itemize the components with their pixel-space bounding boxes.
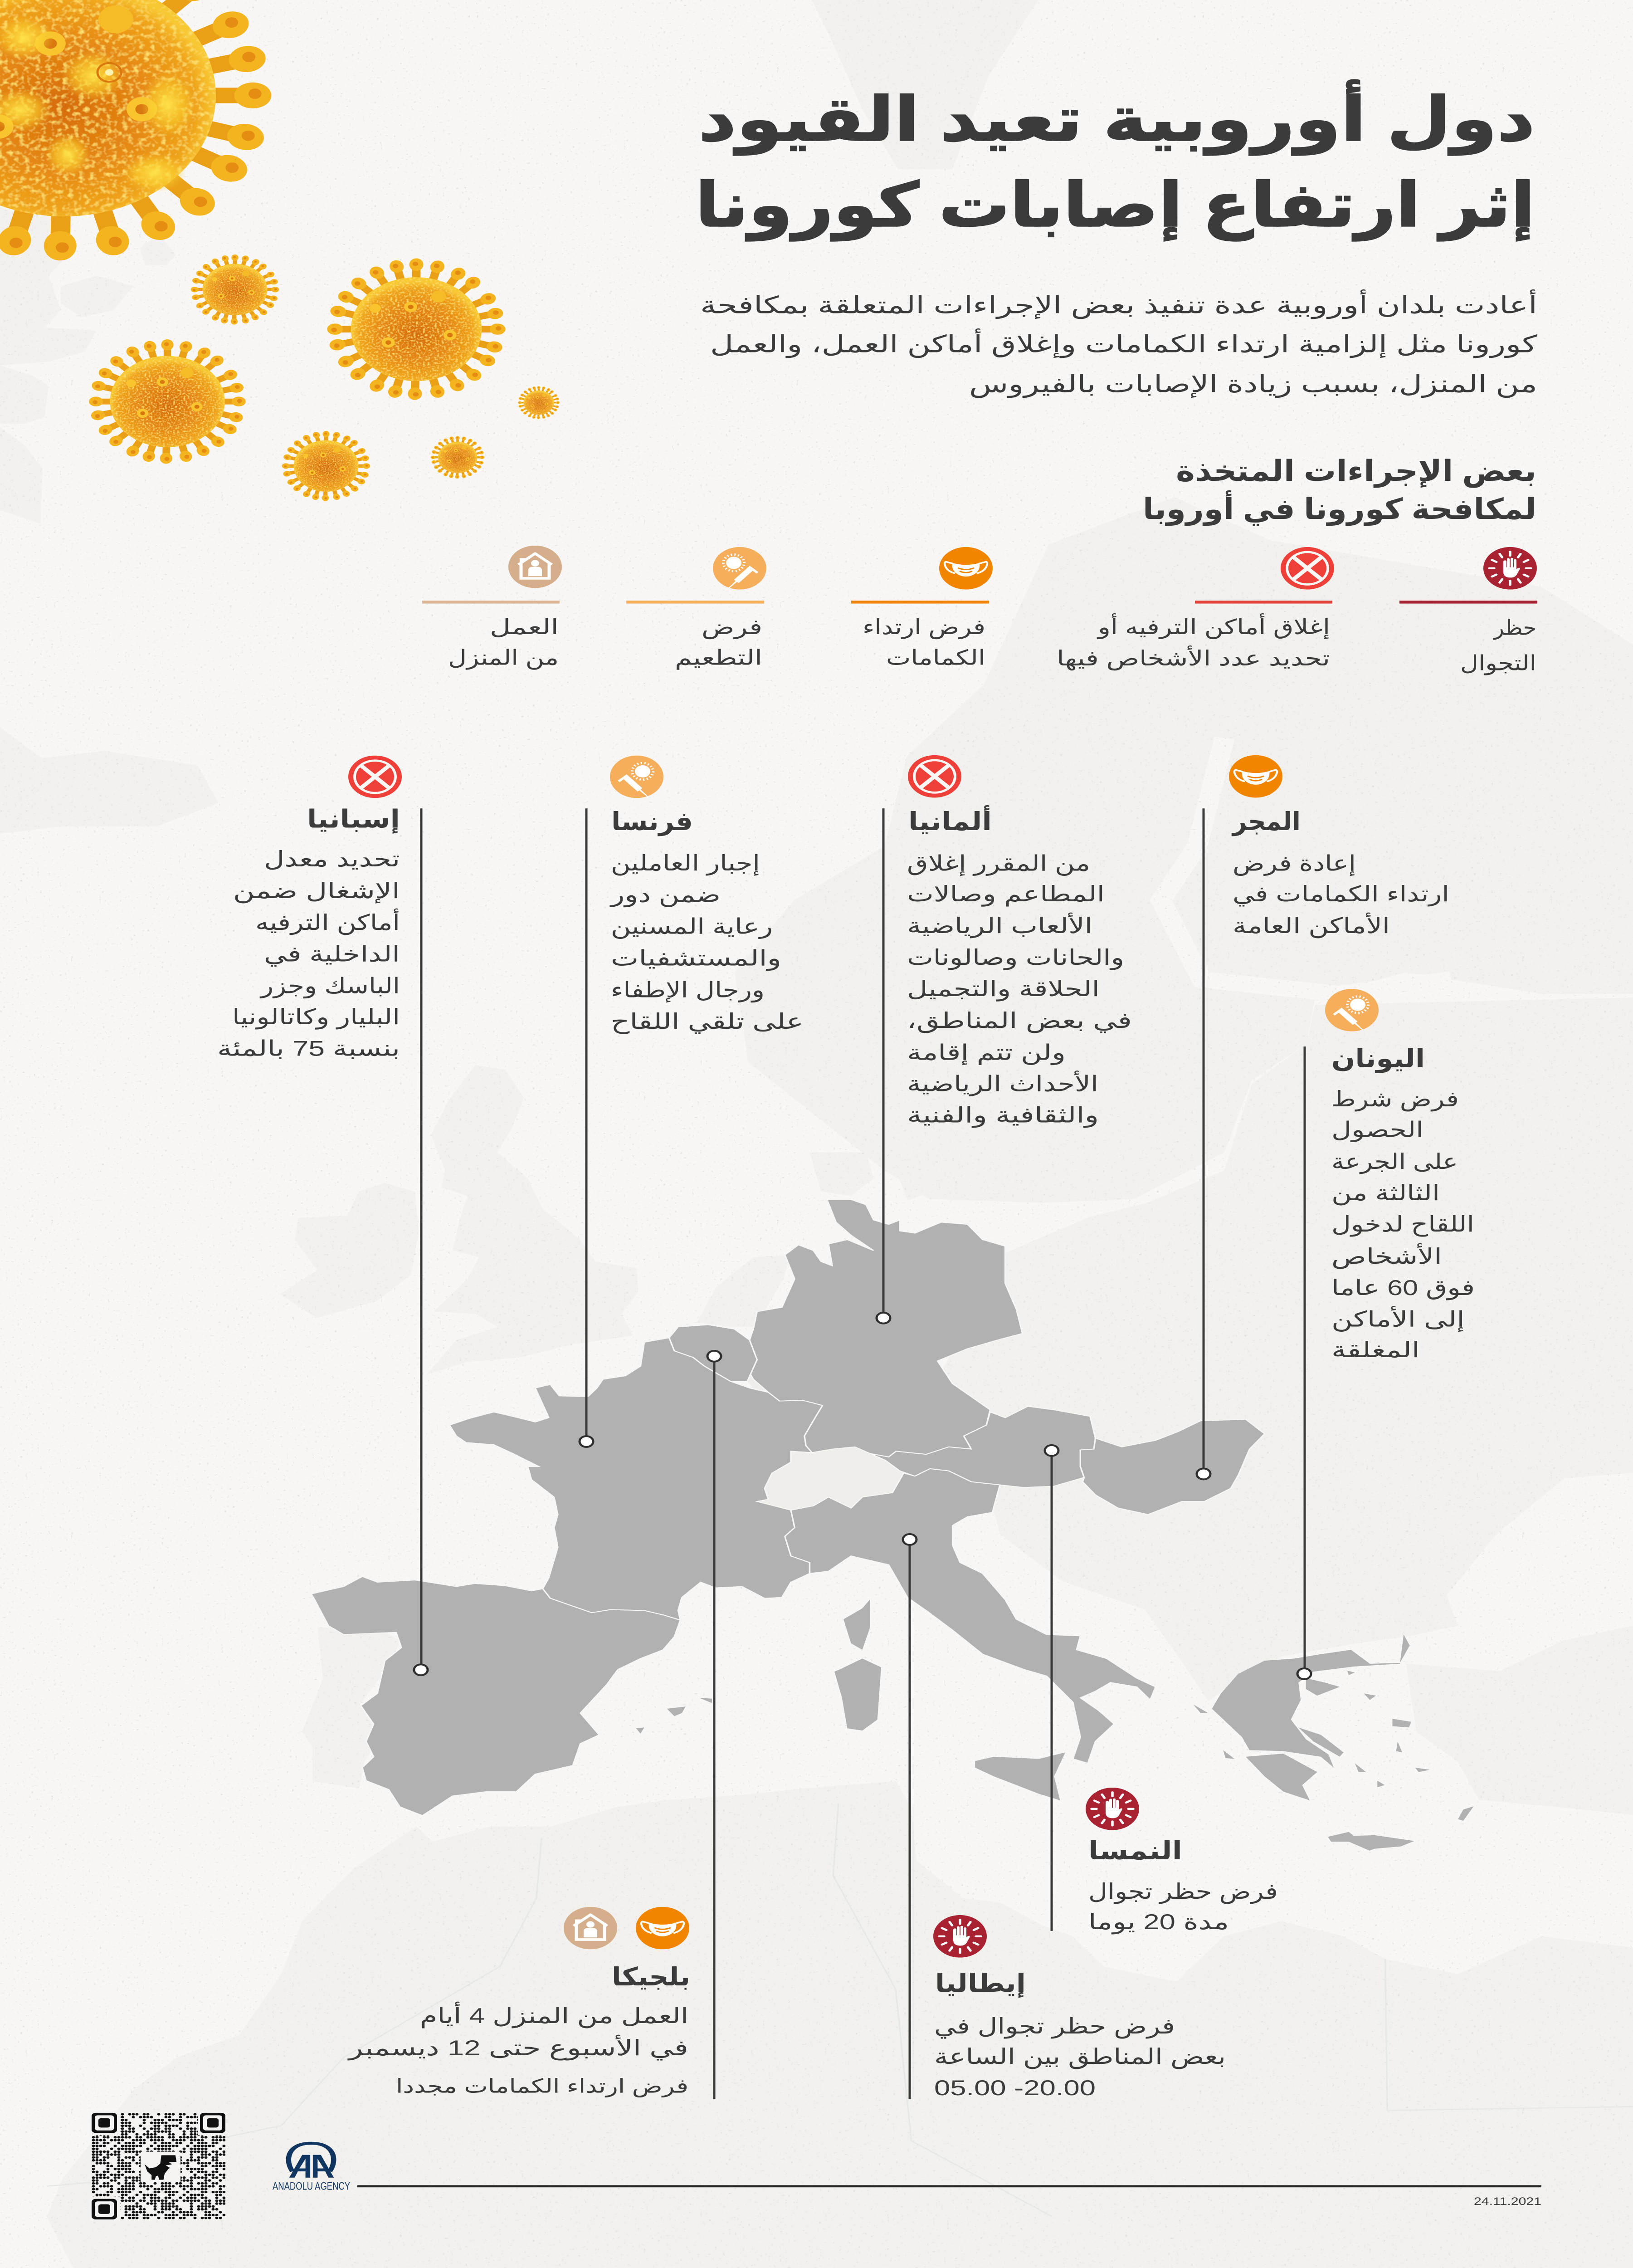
leader line xyxy=(903,1534,916,2099)
leader line xyxy=(1197,808,1210,1479)
legend: work from home: من المنزل xyxy=(448,646,559,670)
body text xyxy=(934,2014,1226,2100)
virus: cluster lower xyxy=(282,431,370,501)
map: Sardinia and Corsica xyxy=(834,1600,881,1730)
body text: إعادة فرض xyxy=(1233,851,1356,876)
body text: ضمن دور xyxy=(609,883,721,907)
leader line xyxy=(877,808,890,1324)
leader line xyxy=(414,808,428,1675)
body text: الداخلية في xyxy=(264,943,400,967)
virus: cluster small xyxy=(191,254,279,325)
legend: curfew: حظر xyxy=(1492,616,1536,640)
legend: vaccination xyxy=(626,547,766,670)
body text: في الأسبوع حتى 12 ديسمبر xyxy=(347,2034,688,2060)
legend: closures: تحديد عدد الأشخاص فيها xyxy=(1057,645,1330,671)
footer rule xyxy=(357,2185,1541,2187)
legend: vaccination: التطعيم xyxy=(675,646,762,670)
heading: النمسا xyxy=(1088,1837,1182,1865)
title: دول أوروبية تعيد القيود xyxy=(698,79,1535,156)
icon: closures xyxy=(348,756,402,798)
body text: ارتداء الكمامات في xyxy=(1233,882,1449,907)
icon: home xyxy=(564,1907,617,1949)
body text: على تلقي اللقاح xyxy=(611,1010,804,1034)
map: France xyxy=(449,1338,823,1620)
map: Belgium xyxy=(669,1325,757,1382)
body text: الأماكن العامة xyxy=(1233,912,1390,938)
map: Luxembourg xyxy=(747,1366,768,1392)
body text: اللقاح لدخول xyxy=(1331,1212,1474,1237)
heading: إسبانيا xyxy=(307,805,400,834)
map of affected European countries xyxy=(311,1199,1430,1816)
legend heading: بعض الإجراءات المتخذة xyxy=(1176,455,1536,488)
map: Sicily xyxy=(975,1752,1065,1800)
body text: بعض المناطق بين الساعة xyxy=(934,2045,1226,2069)
heading: المجر xyxy=(1231,808,1301,836)
map: Balearic islands xyxy=(636,1698,712,1734)
body text xyxy=(1088,1880,1278,1934)
body text: الأشخاص xyxy=(1331,1243,1442,1269)
body text: فرض ارتداء الكمامات مجددا xyxy=(396,2076,688,2097)
body text: المطاعم وصالات xyxy=(907,882,1105,907)
icon: crossed circle xyxy=(1281,547,1334,590)
title: إثر ارتفاع إصابات كورونا xyxy=(695,171,1535,241)
panel: Austria xyxy=(1045,1445,1278,1934)
icon: syringe and virus xyxy=(713,547,766,593)
map: Crete and Aegean islands xyxy=(1328,1806,1474,1851)
body text: على الجرعة xyxy=(1331,1150,1458,1174)
Anadolu Agency logo: ANADOLU AGENCY xyxy=(273,2180,350,2192)
legend: work from home: العمل xyxy=(490,616,559,639)
body text: والثقافية والفنية xyxy=(907,1103,1099,1128)
body text: بنسبة 75 بالمئة xyxy=(217,1037,400,1061)
icon: home xyxy=(508,546,562,588)
legend: curfew: التجوال xyxy=(1460,652,1536,675)
virus: large cropped top left xyxy=(0,0,271,261)
map: Italy xyxy=(785,1469,1155,1763)
panel: Belgium xyxy=(347,1351,721,2099)
heading: اليونان xyxy=(1331,1045,1425,1073)
leader line xyxy=(1045,1445,1058,1931)
Anadolu Agency logo xyxy=(273,2143,350,2192)
icon: curfew xyxy=(933,1915,987,1958)
legend: work from home xyxy=(422,546,562,670)
body text: ولن تتم إقامة xyxy=(907,1041,1066,1065)
legend: curfew xyxy=(1399,547,1537,675)
icon: face mask xyxy=(636,1907,689,1949)
body text: العمل من المنزل 4 أيام xyxy=(420,2002,688,2028)
heading: بلجيكا xyxy=(612,1963,690,1991)
body text: الثالثة من xyxy=(1331,1181,1440,1206)
map: Spain xyxy=(311,1577,680,1816)
virus: cluster left xyxy=(89,339,246,464)
map: Greece xyxy=(1193,1634,1430,1800)
icon: vaccination xyxy=(1325,989,1379,1035)
intro paragraph: كورونا مثل إلزامية ارتداء الكمامات وإغلاق أماكن العمل، والعمل xyxy=(710,328,1538,358)
virus: cluster tiny xyxy=(431,436,484,479)
body text: ورجال الإطفاء xyxy=(611,978,765,1002)
heading: إيطاليا xyxy=(935,1970,1026,1998)
body text: الألعاب الرياضية xyxy=(907,912,1092,938)
body text xyxy=(347,2002,688,2097)
body text xyxy=(217,847,400,1061)
body text xyxy=(609,851,804,1034)
leader line xyxy=(1297,1046,1311,1679)
body text: فرض حظر تجوال في xyxy=(934,2014,1175,2039)
body text: 05.00 -20.00 xyxy=(934,2076,1096,2100)
virus: smallest xyxy=(518,386,560,419)
map: Austria xyxy=(870,1406,1096,1487)
body text xyxy=(1331,1087,1475,1362)
body text: فرض حظر تجوال xyxy=(1088,1880,1278,1904)
heading: ألمانيا xyxy=(908,805,992,836)
body text: والحانات وصالونات xyxy=(907,946,1124,970)
legend: vaccination: فرض xyxy=(702,616,762,639)
icon: vaccination xyxy=(610,756,663,802)
legend heading: لمكافحة كورونا في أوروبا xyxy=(1143,490,1536,526)
panel: Italy xyxy=(903,1534,1226,2100)
icon: face mask xyxy=(939,547,993,590)
panel: Greece xyxy=(1297,989,1475,1679)
icon: closures xyxy=(908,755,961,797)
body text: المغلقة xyxy=(1331,1338,1420,1362)
intro paragraph: من المنزل، بسبب زيادة الإصابات بالفيروس xyxy=(969,371,1537,398)
body text: الحلاقة والتجميل xyxy=(907,977,1100,1001)
body text: إجبار العاملين xyxy=(611,851,760,875)
body text xyxy=(907,851,1132,1128)
heading: فرنسا xyxy=(611,808,693,836)
intro paragraph xyxy=(700,289,1538,398)
legend: closures xyxy=(1057,547,1334,671)
panel: Germany xyxy=(877,755,1132,1324)
leader line xyxy=(580,808,593,1447)
body text: والمستشفيات xyxy=(611,946,781,971)
panel: Hungary xyxy=(1197,755,1449,1479)
body text: الإشغال ضمن xyxy=(233,879,400,903)
QR code xyxy=(79,2112,227,2221)
icon: face mask xyxy=(1229,755,1282,797)
legend: masks: فرض ارتداء xyxy=(863,616,985,639)
body text: إلى الأماكن xyxy=(1331,1306,1465,1332)
panel: Spain xyxy=(217,756,428,1675)
title xyxy=(695,79,1535,241)
icon: curfew xyxy=(1086,1788,1139,1830)
panel: France xyxy=(580,756,804,1447)
body text: فرض شرط xyxy=(1331,1087,1459,1111)
map: Hungary xyxy=(1080,1419,1265,1515)
legend heading xyxy=(1143,455,1536,526)
legend: closures: إغلاق أماكن الترفيه أو xyxy=(1097,613,1330,639)
body text: رعاية المسنين xyxy=(611,914,773,939)
body text: الباسك وجزر xyxy=(259,974,400,998)
icon: raised hand curfew xyxy=(1483,547,1537,590)
body text xyxy=(1233,851,1449,938)
map: Germany xyxy=(750,1199,1023,1457)
body text: تحديد معدل xyxy=(264,847,400,871)
body text: الحصول xyxy=(1331,1118,1423,1142)
legend: masks: الكمامات xyxy=(886,646,985,670)
body text: مدة 20 يوما xyxy=(1088,1910,1229,1934)
virus: cluster largest xyxy=(327,258,506,400)
intro paragraph: أعادت بلدان أوروبية عدة تنفيذ بعض الإجراءات المتعلقة بمكافحة xyxy=(700,289,1537,319)
map: Switzerland xyxy=(757,1447,904,1510)
body text: من المقرر إغلاق xyxy=(907,851,1090,876)
body text: الأحداث الرياضية xyxy=(907,1070,1098,1096)
leader line xyxy=(707,1351,721,2099)
body text: أماكن الترفيه xyxy=(255,908,400,935)
body text: البليار وكاتالونيا xyxy=(232,1005,400,1029)
body text: في بعض المناطق، xyxy=(907,1009,1132,1033)
date: 24.11.2021 xyxy=(1474,2195,1541,2207)
body text: فوق 60 عاما xyxy=(1331,1276,1475,1300)
legend: masks xyxy=(851,547,993,670)
virus illustrations xyxy=(0,0,560,501)
